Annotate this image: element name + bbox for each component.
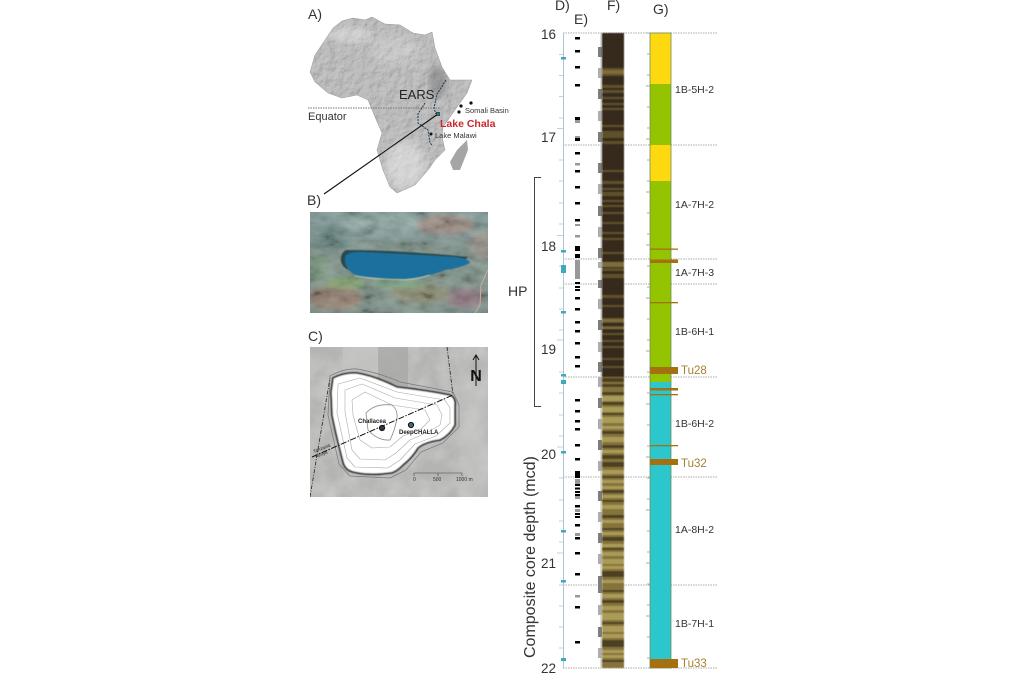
EARS label: EARS [399,87,435,102]
Lake Malawi marker and label: Lake Malawi [435,131,477,140]
heading A: A) [308,6,322,22]
depth tick labels: 16 [541,27,556,42]
scale bar: 1000 m [456,477,473,483]
core section labels: 1A-7H-2 [675,199,714,211]
panel C: bathymetric map [310,347,488,497]
Somali Basin core sites [457,101,473,114]
column G: lithology units [646,33,671,668]
depth tick labels: 18 [541,239,556,254]
north arrow: N [470,368,482,385]
depth tick labels: 22 [541,661,556,676]
depth tick labels: 21 [541,556,556,571]
tephra labels [681,365,707,670]
border lines [310,347,453,497]
depth axis label: Composite core depth (mcd) [522,456,539,658]
DeepCHALLA site [399,422,439,436]
depth tick labels: 17 [541,130,556,145]
equator label: Equator [308,111,347,123]
Challacea site [358,419,387,431]
depth tick labels: 20 [541,447,556,462]
border labels: Kenya [315,449,329,459]
tephra labels: Tu33 [681,658,707,670]
lake water [345,252,470,279]
depth contours [337,378,450,468]
column F: core scan photo [602,33,624,668]
HP label: HP [508,283,527,299]
transect line [312,395,453,457]
tephra labels: Tu32 [681,458,707,470]
panel B: aerial photo of the lake [307,212,494,313]
depth tick labels [541,27,556,676]
DeepCHALLA site: DeepCHALLA [399,430,439,436]
Lake Chala marker [436,112,440,116]
column E: black and grey layers [575,37,580,644]
north arrow [471,354,481,386]
panel labels D-G: G) [653,1,669,17]
border labels [313,444,331,458]
core section labels [675,84,714,630]
panel A: Africa map [305,6,509,198]
heading C: C) [308,328,323,344]
column F: grey density blocks [598,33,602,668]
column D: teal markers [561,57,566,661]
lake shadow rim [341,250,468,270]
panel labels D-G: E) [574,11,588,27]
core section labels: 1A-7H-3 [675,267,714,279]
core section labels: 1B-7H-1 [675,618,714,630]
depth axis [541,27,564,676]
depth tick labels: 19 [541,342,556,357]
tephra layers [650,248,678,668]
Madagascar [450,140,468,170]
Africa relief [305,12,477,198]
scale bar: 500 [433,477,442,483]
leader line from Lake Chala to panel B [324,114,438,194]
core section labels: 1A-8H-2 [675,524,714,536]
panel labels D-G [555,0,669,27]
Challacea site: Challacea [358,419,387,425]
core section labels: 1B-6H-1 [675,326,714,338]
Somali Basin label: Somali Basin [465,106,509,115]
EARS rift lines [418,80,446,145]
core section labels: 1B-6H-2 [675,418,714,430]
tephra labels: Tu28 [681,365,707,377]
scale bar: 0 [413,477,416,483]
Lake Chala label: Lake Chala [440,118,496,130]
border labels: Tanzania [313,442,332,454]
core section labels: 1B-5H-2 [675,84,714,96]
HP bracket [534,178,541,406]
scale bar [413,472,472,481]
equator line [308,107,440,109]
section boundary dotted lines [563,33,717,668]
heading B: B) [307,192,321,208]
